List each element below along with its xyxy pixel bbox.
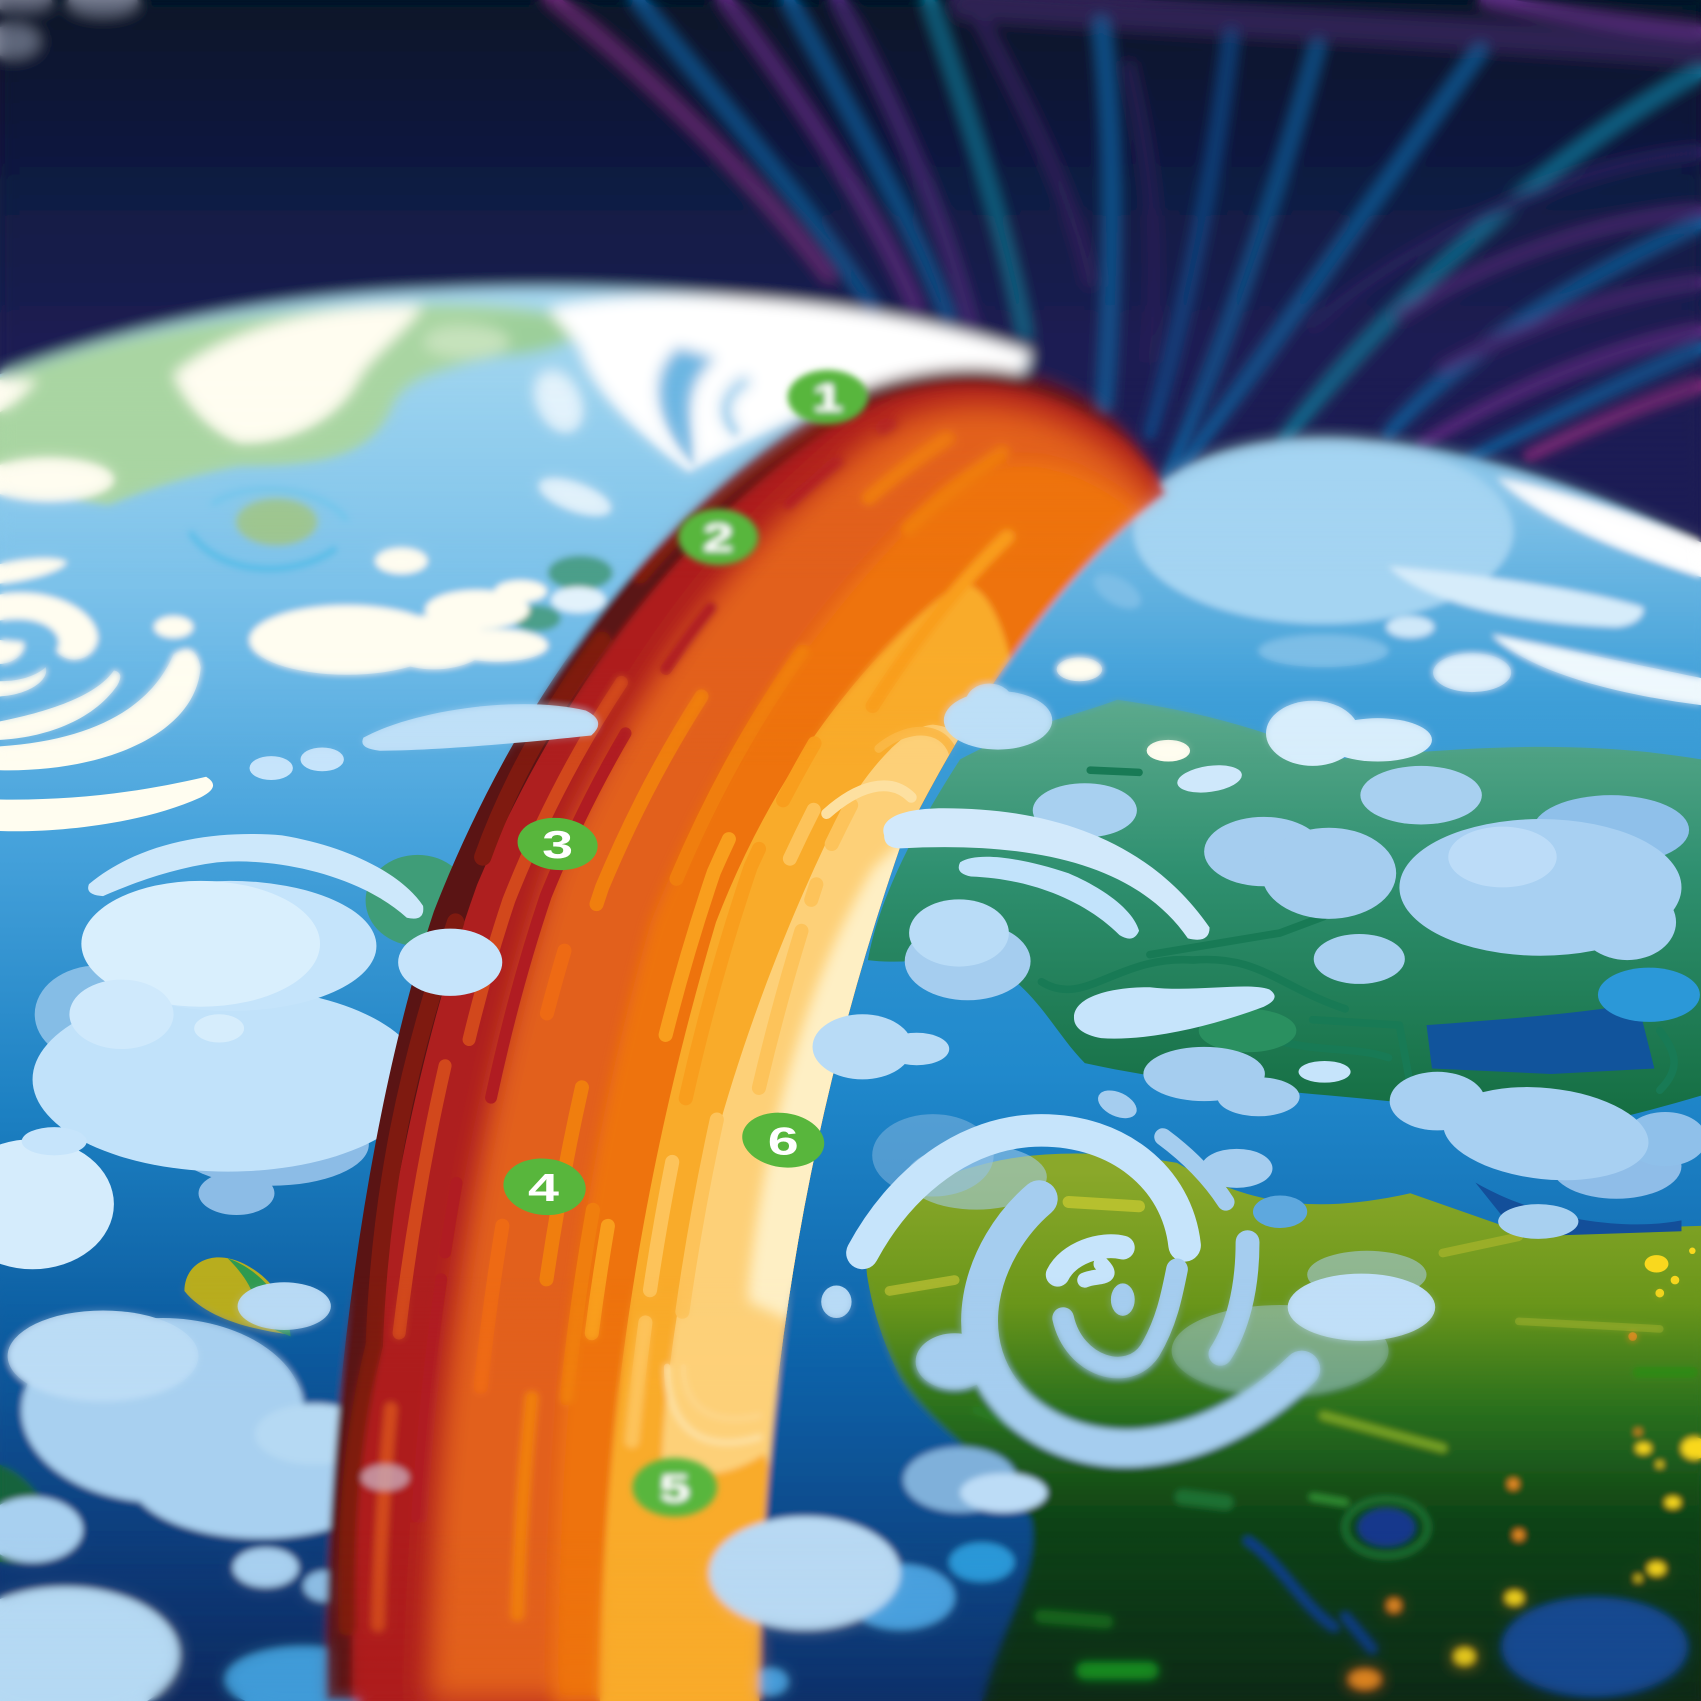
badge 4: 4 — [528, 1166, 559, 1210]
right upper continent — [868, 700, 1701, 1129]
left top land — [0, 303, 613, 946]
amber arc streaks — [584, 526, 1018, 1341]
lower right clouds — [753, 1447, 1687, 1696]
badge 2 — [678, 509, 758, 565]
mantle deep red layer — [344, 376, 1168, 1701]
upper mantle orange-red layer — [410, 384, 1165, 1701]
badge 6 — [739, 1108, 828, 1173]
clouds overlapping wedge — [361, 683, 1210, 1629]
lower mantle orange layer — [548, 457, 1138, 1701]
crust outer dark layer — [318, 358, 1160, 1701]
badge 4 — [501, 1155, 588, 1218]
badge 6: 6 — [768, 1119, 799, 1163]
blurred caption remnants — [0, 0, 138, 57]
badge 1 — [788, 370, 868, 424]
badge 3 — [515, 815, 600, 873]
right top ice and cloud — [1088, 439, 1701, 705]
pale gold arc streaks — [620, 465, 1112, 1701]
city lights — [1350, 1248, 1701, 1688]
badge 5 — [632, 1458, 717, 1517]
left top snow cap — [525, 296, 1031, 523]
inner core cream glow — [740, 844, 900, 1326]
inner core pale layer — [657, 722, 958, 1478]
left lower clouds — [0, 1310, 393, 1701]
inner core ripples — [667, 731, 955, 1443]
left cream clouds — [0, 458, 605, 831]
aurora magnetic field lines — [548, 0, 1701, 477]
earth cross-section wedge — [318, 358, 1170, 1701]
badge 5: 5 — [659, 1466, 690, 1510]
outer core amber layer — [594, 582, 1012, 1701]
left lower island — [0, 1257, 331, 1562]
right blue clouds — [905, 657, 1701, 1239]
crust stepped streaks — [347, 412, 835, 1627]
orange arc streaks — [464, 434, 1002, 1701]
badge 1: 1 — [812, 376, 843, 420]
earth left hemisphere ocean — [0, 288, 1031, 1701]
orange-red arc streaks — [366, 674, 630, 1635]
cyclone swirl over continent — [821, 1114, 1435, 1448]
badge 2: 2 — [703, 516, 734, 560]
badge 3: 3 — [542, 823, 573, 867]
right lower continent — [866, 1154, 1701, 1701]
earth right hemisphere ocean — [651, 442, 1701, 1701]
dark red arc streaks — [418, 416, 900, 1520]
left blue clouds — [0, 747, 423, 1269]
